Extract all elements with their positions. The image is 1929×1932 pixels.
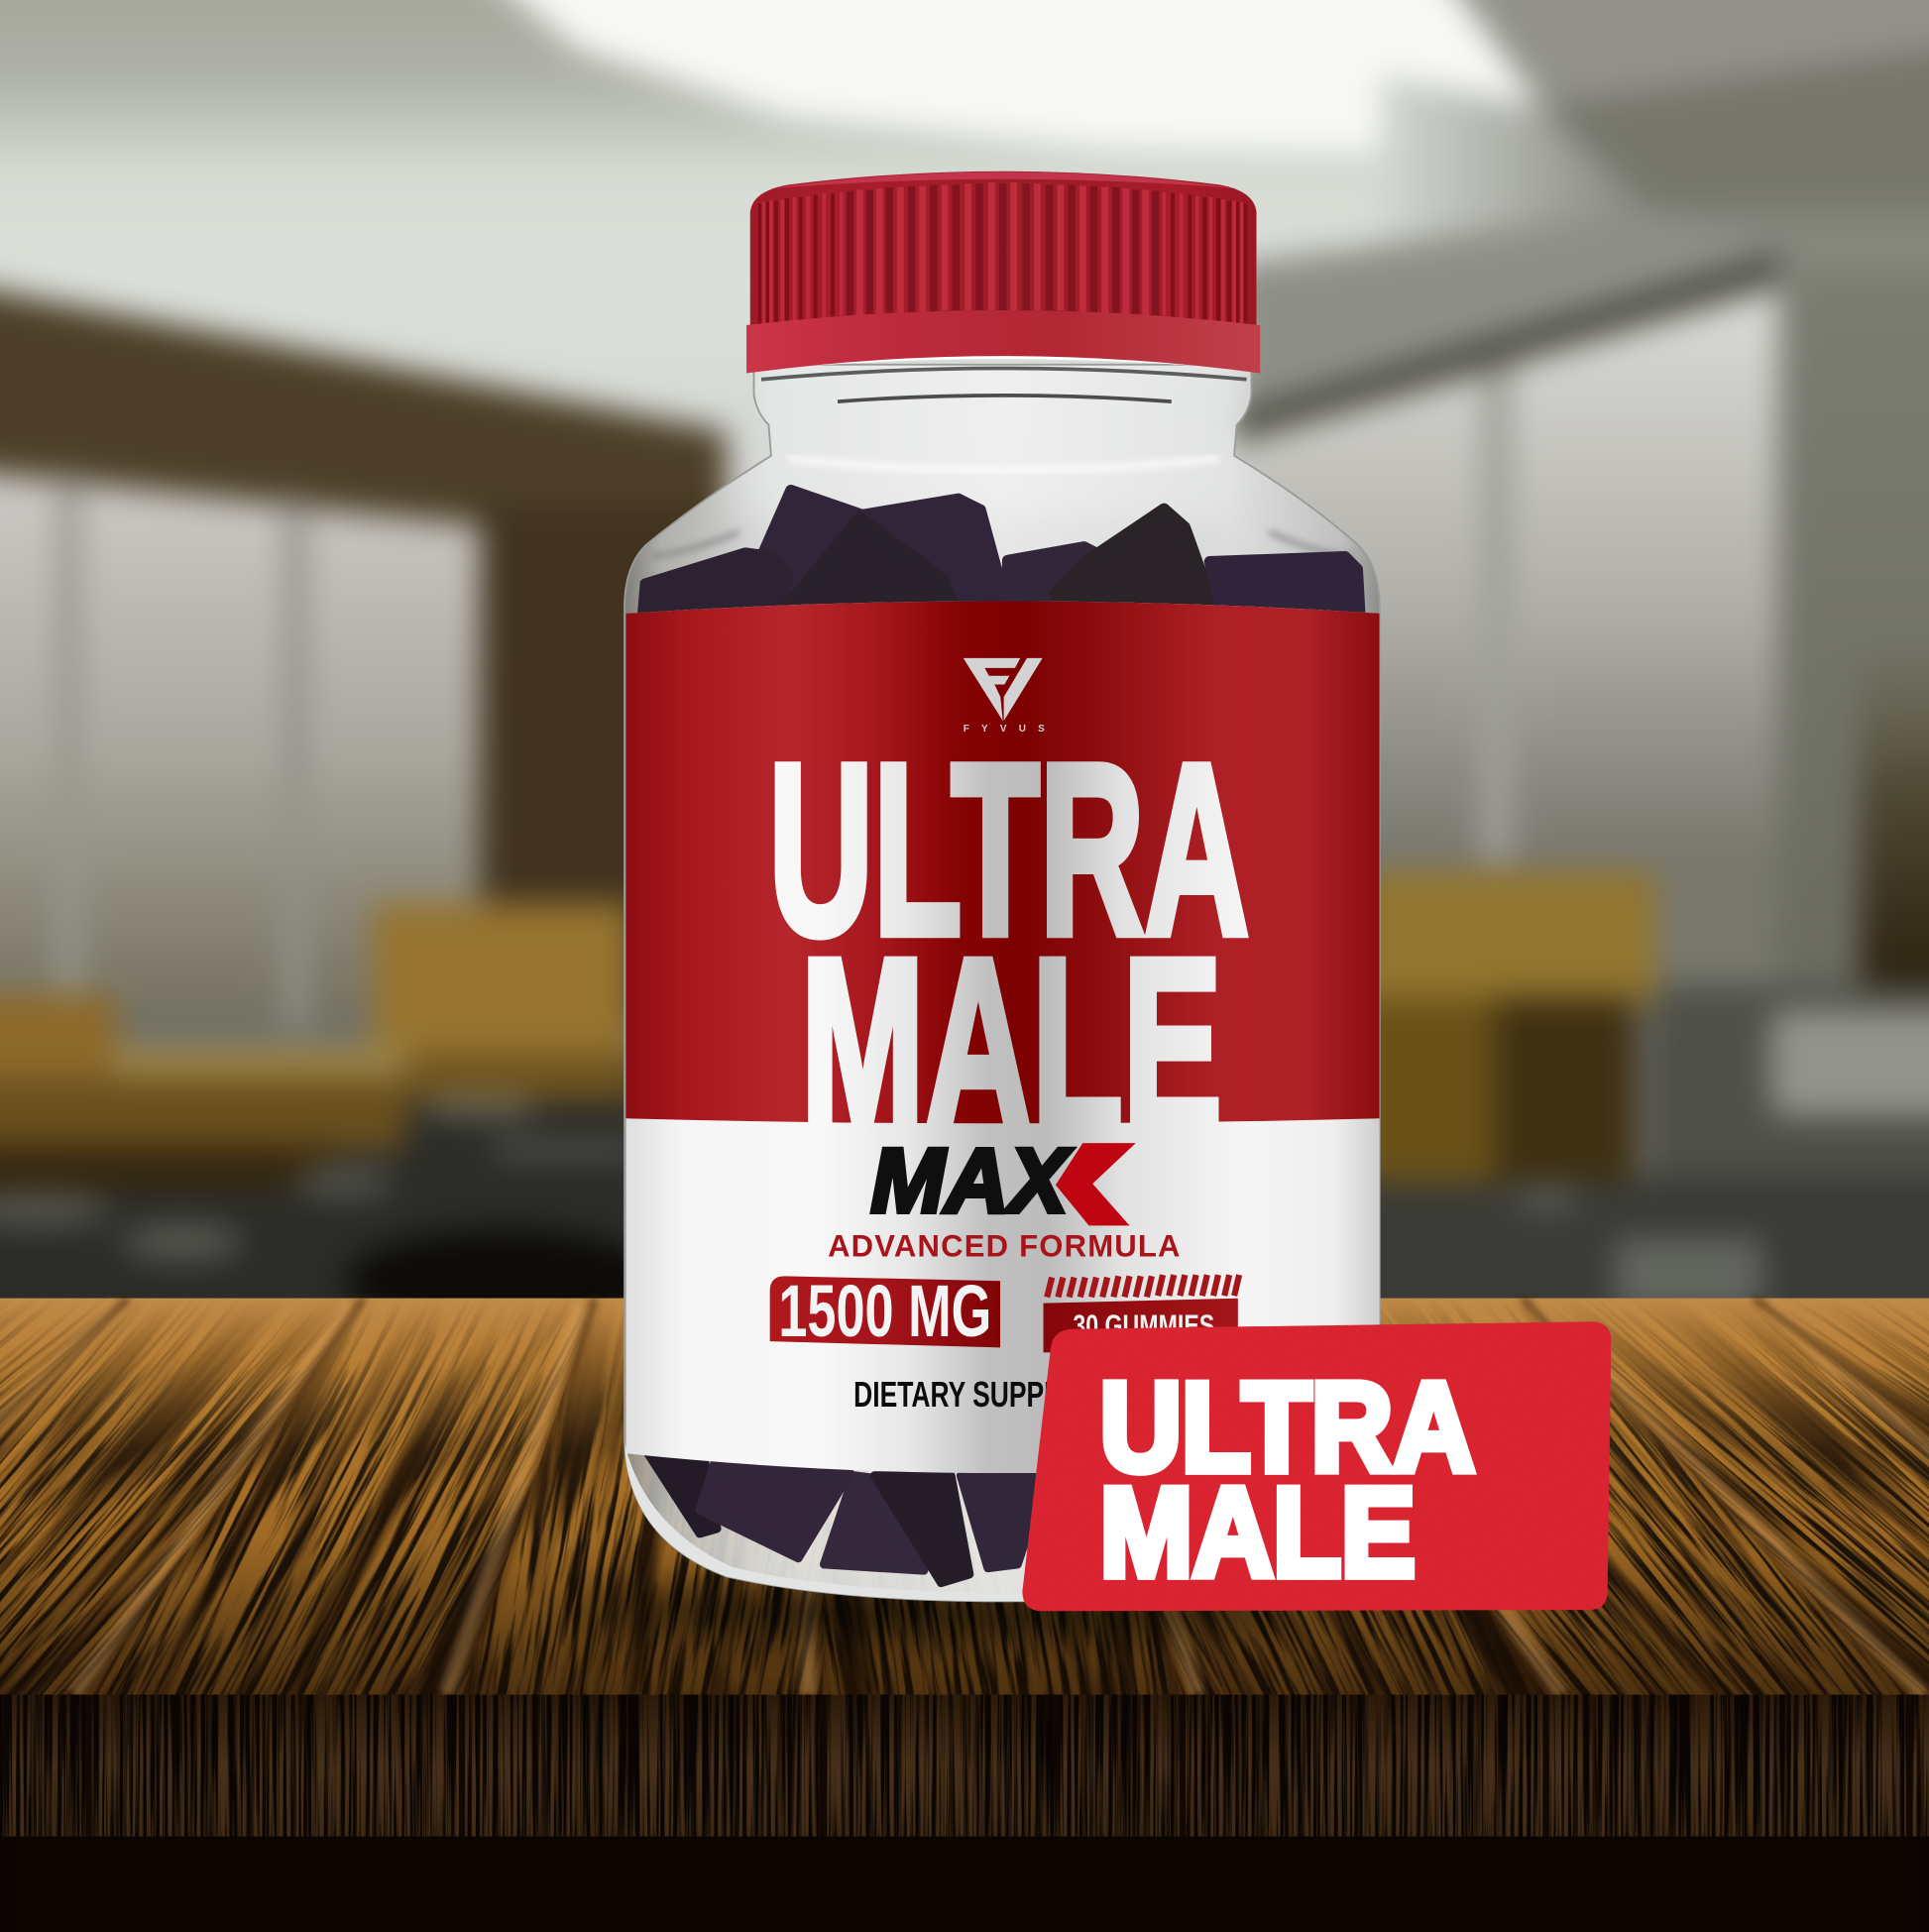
hatched stripe bbox=[1047, 1275, 1239, 1297]
table front edge bbox=[0, 1695, 1929, 1837]
gummies count box: 30 GUMMIES bbox=[1073, 1309, 1214, 1342]
red ultra male card bbox=[1022, 1321, 1611, 1611]
bottle cap bbox=[746, 171, 1260, 374]
product name: ULTRA bbox=[768, 714, 1249, 986]
glass body bbox=[624, 365, 1380, 1601]
card title bbox=[1100, 1357, 1474, 1602]
wooden table top bbox=[0, 1299, 1929, 1695]
blurred room background bbox=[0, 0, 1929, 1336]
card background bbox=[1022, 1321, 1611, 1611]
bottle bbox=[624, 356, 1380, 1601]
card title: MALE bbox=[1100, 1461, 1416, 1602]
glass highlights bbox=[653, 356, 1352, 557]
MAX wordmark bbox=[869, 1143, 1136, 1225]
cap ribs bbox=[760, 182, 1245, 324]
dark area beneath the table bbox=[0, 1837, 1929, 1932]
gummies seen below the label bbox=[648, 1453, 1047, 1583]
cap lower band bbox=[746, 310, 1260, 374]
MAX wordmark: MAX bbox=[871, 1131, 1073, 1232]
bottle shadow on table bbox=[567, 1586, 1305, 1636]
product name bbox=[775, 761, 1249, 1124]
gummies behind the top of the glass bbox=[643, 491, 1360, 614]
product label bbox=[625, 579, 1380, 1515]
brand logo bbox=[964, 658, 1045, 735]
card title: ULTRA bbox=[1100, 1357, 1474, 1498]
gummies count box bbox=[1044, 1299, 1238, 1352]
brand logo: FYVUS bbox=[964, 724, 1045, 735]
advanced formula: ADVANCED FORMULA bbox=[828, 1228, 1180, 1263]
dietary supplement: DIETARY SUPPLEMENT bbox=[853, 1374, 1152, 1415]
1500 mg badge bbox=[769, 1276, 1001, 1348]
white label panel bbox=[625, 579, 1380, 1515]
red label panel bbox=[625, 579, 1380, 1123]
ribbed cap body bbox=[750, 171, 1256, 332]
product name: MALE bbox=[801, 908, 1222, 1181]
1500 mg badge: 1500 MG bbox=[778, 1270, 991, 1352]
cap top rim bbox=[771, 171, 1237, 188]
